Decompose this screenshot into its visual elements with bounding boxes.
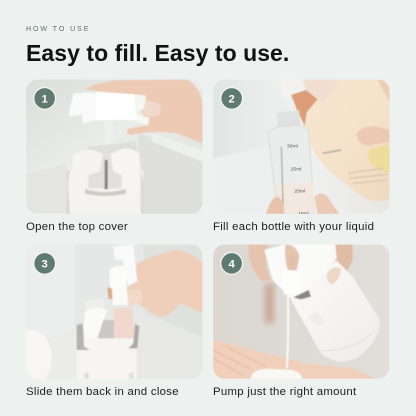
panel: step 4 pump the right amount xyxy=(213,244,390,379)
photo: pumping lotion into palm xyxy=(213,244,390,379)
panel: step 2 fill each bottle xyxy=(213,79,390,217)
caption step 3: Slide them back in and close xyxy=(26,386,179,398)
bottle scale markings: 25ml xyxy=(291,166,301,172)
bottle scale markings: 15ml xyxy=(298,211,309,217)
step number badge 4: 4 xyxy=(229,258,236,270)
photo: pouring into measuring bottle xyxy=(213,79,390,214)
eyebrow label: HOW TO USE xyxy=(26,26,90,32)
step number badge 2: 2 xyxy=(229,93,235,105)
step number badge 1 xyxy=(34,87,55,109)
caption step 2: Fill each bottle with your liquid xyxy=(213,221,374,233)
panel: step 1 open the top cover xyxy=(26,79,203,214)
step number badge 3 xyxy=(34,252,55,274)
photo: hand lifting cover xyxy=(26,79,203,214)
step number badge 4 xyxy=(221,252,242,274)
step number badge 1: 1 xyxy=(42,93,48,105)
panel: step 3 slide them back xyxy=(26,244,202,379)
step number badge 3: 3 xyxy=(42,258,48,270)
title: Easy to fill. Easy to use. xyxy=(26,40,289,66)
bottle scale markings: 30ml xyxy=(287,143,298,149)
bottle scale markings: 20ml xyxy=(294,189,305,195)
caption step 1: Open the top cover xyxy=(26,221,128,233)
caption step 4: Pump just the right amount xyxy=(213,386,356,398)
bottle scale markings xyxy=(287,143,309,217)
step number badge 2 xyxy=(221,87,242,109)
photo: inserting bottle into holder xyxy=(26,244,202,379)
